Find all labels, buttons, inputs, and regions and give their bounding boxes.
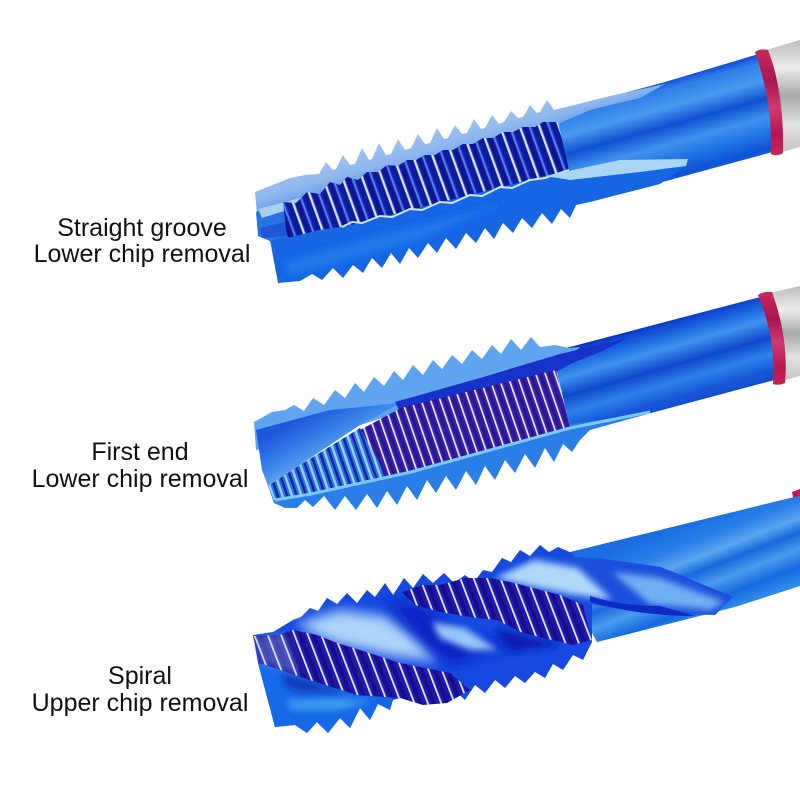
spiral flute dark 3: [385, 600, 520, 665]
lower land and teeth 2: [268, 413, 651, 510]
collar 1: [755, 49, 783, 155]
flute dark edge 3: [590, 596, 695, 616]
grey shank 1: [766, 40, 800, 152]
blue shank 2: [556, 296, 782, 430]
tool: straight groove tap: [255, 40, 800, 283]
dark groove 2: [395, 338, 628, 412]
thread upper-right 3: [402, 578, 592, 645]
tip thread 2: [268, 428, 388, 500]
lower left bright land 3: [258, 663, 393, 733]
thread edge highlight 2: [275, 412, 650, 500]
lower left streak 3: [285, 698, 372, 710]
thread 2: [360, 370, 570, 478]
nose band: [256, 200, 345, 241]
upper flute pale right 3: [612, 572, 725, 610]
pale upper land 1: [255, 84, 665, 214]
upper flute pale 3: [495, 560, 612, 600]
thread 1: [283, 122, 569, 238]
tip flute 2: [256, 403, 401, 486]
label: lower chip removal 1: Lower chip removal: [34, 240, 250, 268]
spiral flute pale second 3: [432, 622, 498, 650]
body and teeth 3: [253, 545, 592, 733]
tool: spiral tap: [253, 489, 800, 733]
nose pale band: [258, 198, 306, 218]
collar 3: [792, 489, 800, 520]
label: upper chip removal: Upper chip removal: [32, 689, 248, 717]
grey shank 2: [770, 286, 800, 381]
nose dark band: [260, 212, 340, 238]
thread tip pale overlay 3: [253, 633, 300, 675]
label: first end: First end: [91, 438, 189, 466]
collar 2: [758, 292, 786, 385]
thread lower-left 3: [253, 630, 470, 705]
spiral flute pale 3: [295, 610, 440, 662]
flute dark centre 3: [495, 628, 560, 652]
wavy highlight edge 1: [342, 170, 569, 227]
tip nose 1: [256, 198, 345, 241]
label: spiral: Spiral: [108, 662, 172, 690]
lower land and teeth 1: [270, 163, 690, 283]
blue shank 3: [566, 496, 800, 642]
label: lower chip removal 2: Lower chip removal: [32, 465, 248, 493]
upper spiral flute base 3: [490, 556, 733, 615]
spear highlight 1: [545, 159, 688, 180]
upper land 2: [254, 337, 580, 450]
label: straight groove: Straight groove: [57, 214, 227, 242]
tool: first end tap: [254, 286, 800, 510]
dark tip patch 3: [282, 672, 345, 692]
blue shank 1: [554, 53, 780, 203]
lower land streak 1: [285, 205, 500, 275]
